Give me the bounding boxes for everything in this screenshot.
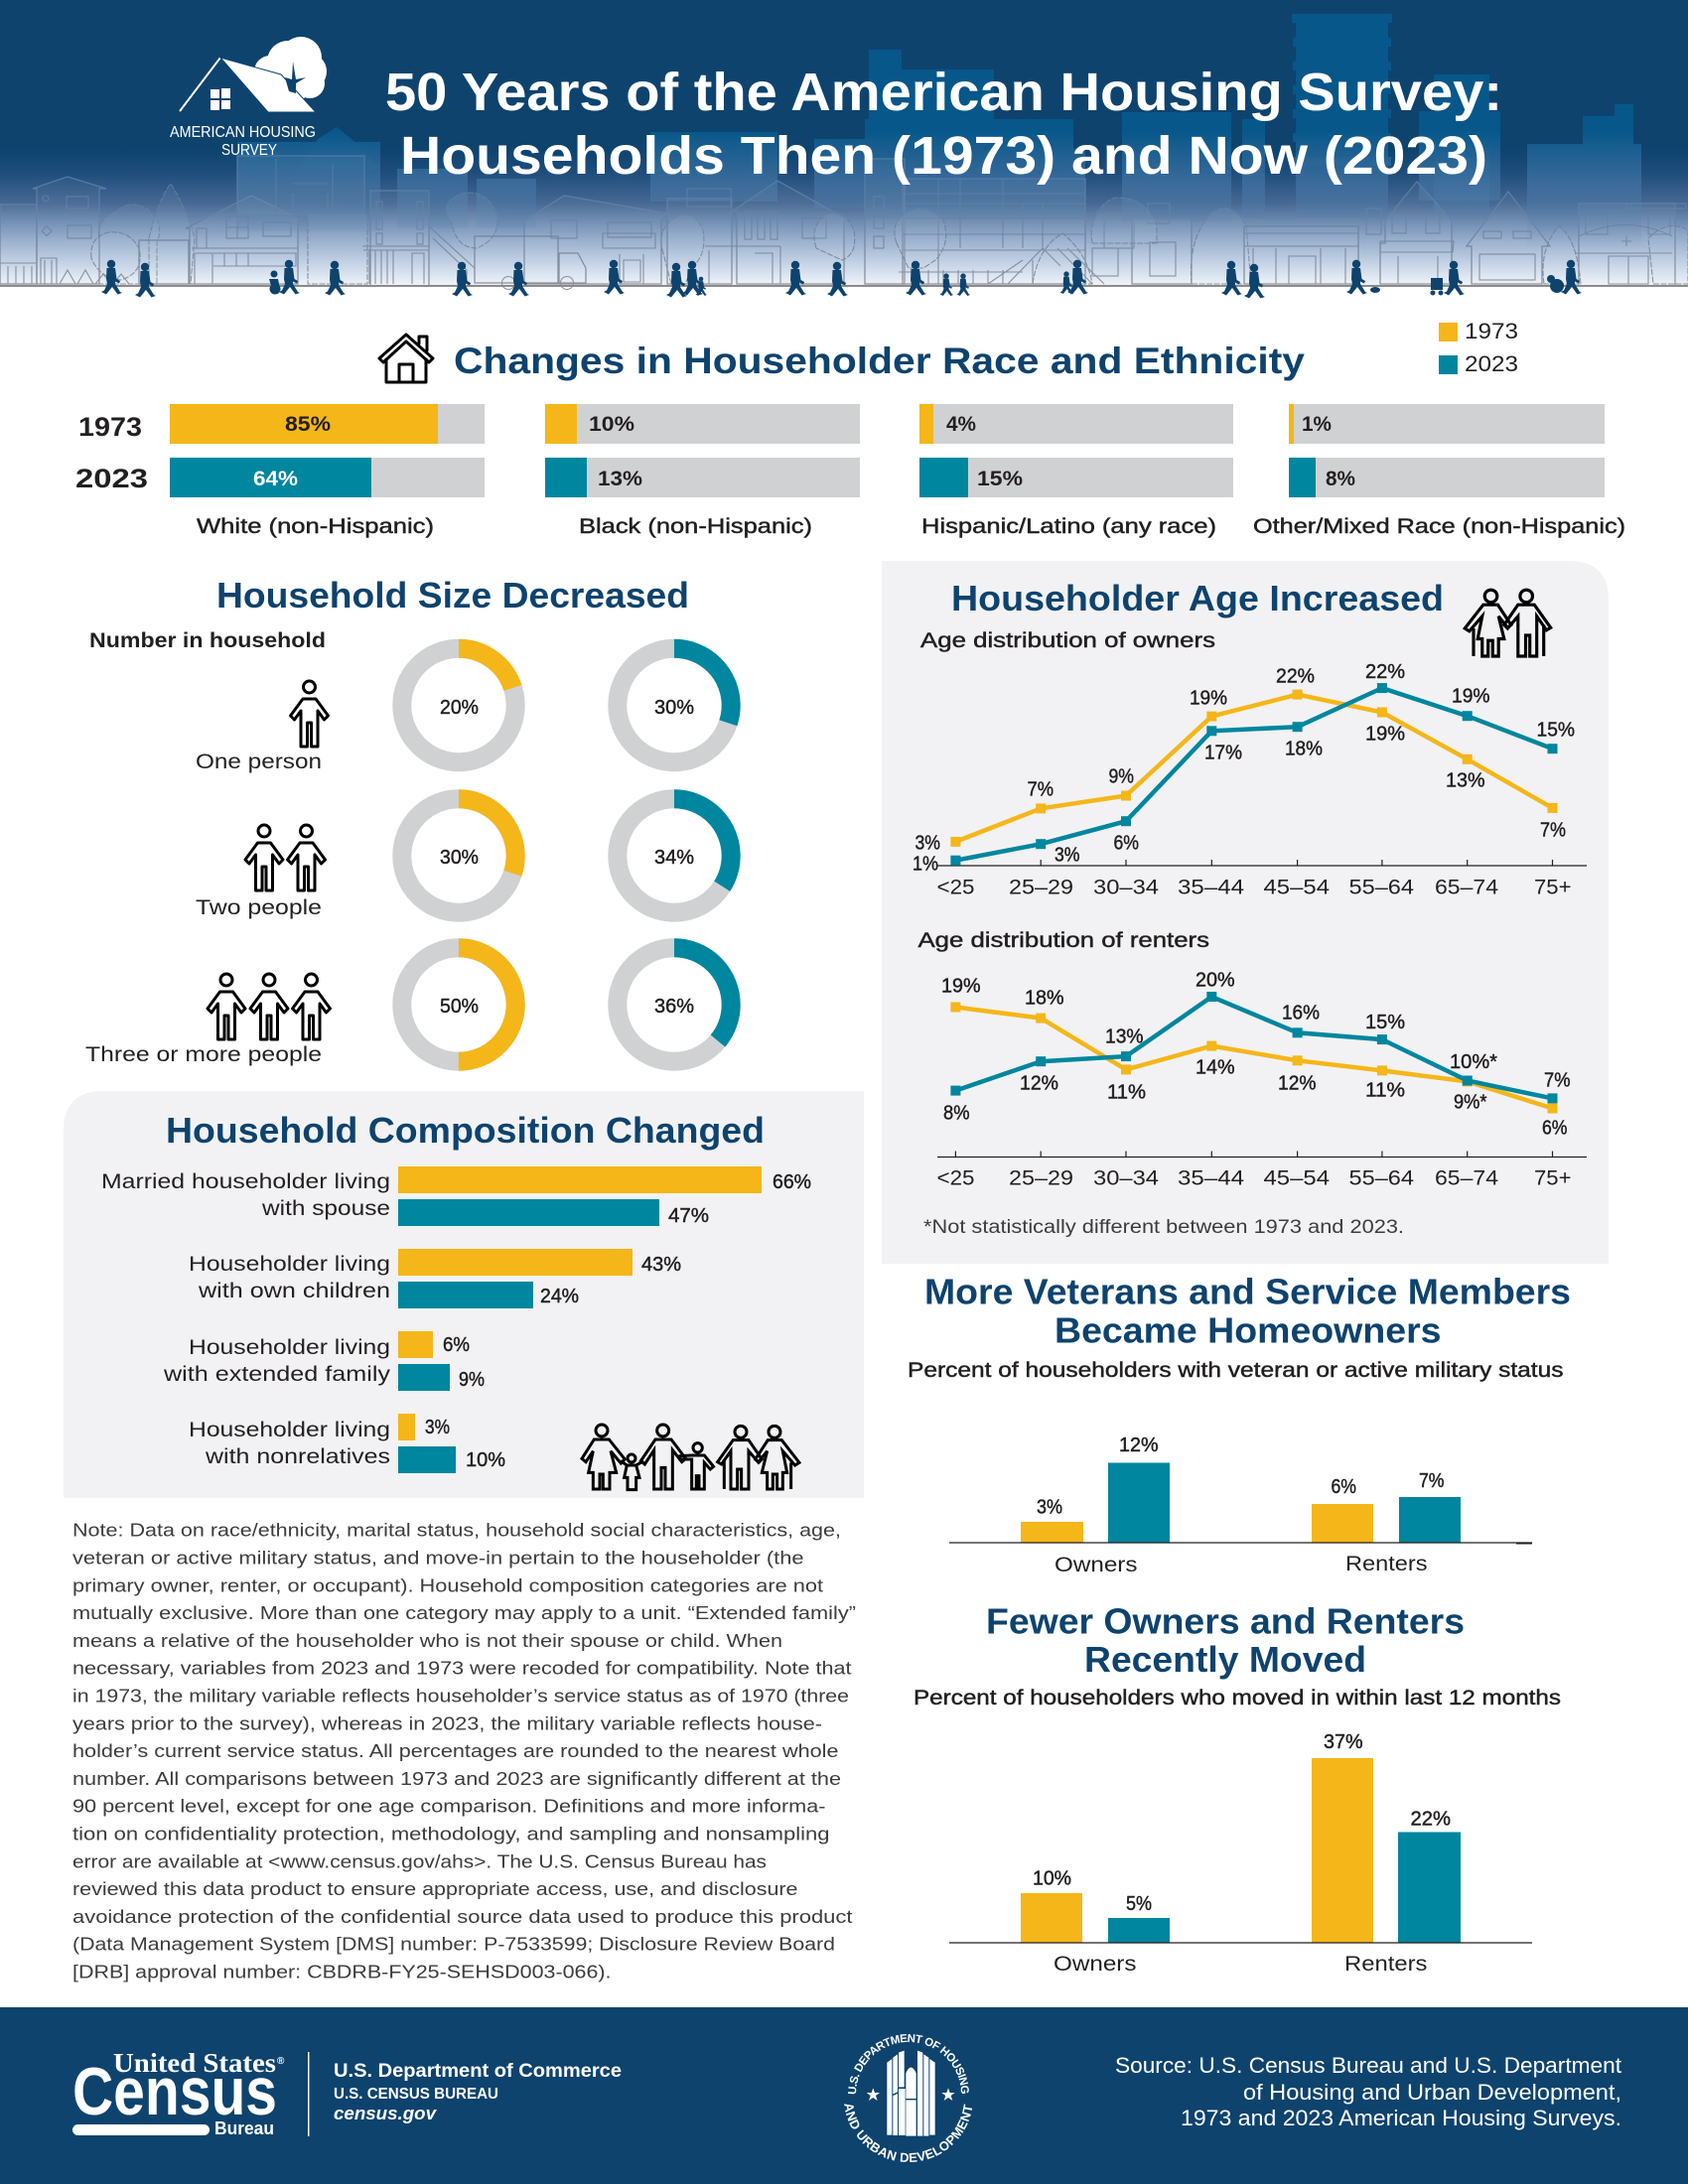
bars: Hispanic: 15% xyxy=(977,468,1023,490)
icon: older couple xyxy=(1465,590,1551,656)
owners value labels: 18% xyxy=(1285,739,1323,760)
bars: Black xyxy=(545,404,860,538)
group: extended family: 9% xyxy=(459,1369,485,1391)
heading: More Veterans and Service Members xyxy=(924,1271,1571,1312)
American Housing Survey logo xyxy=(170,37,327,159)
heading: Recently Moved xyxy=(1084,1639,1366,1680)
panel: household size xyxy=(85,575,731,1066)
heading xyxy=(986,1600,1465,1680)
owners value labels: 1% xyxy=(913,854,938,876)
group: nonrelatives: with nonrelatives xyxy=(205,1444,390,1468)
note text block: error are available at <www.census.gov/ahs>. The U.S. Census Bureau has xyxy=(72,1852,767,1872)
year labels xyxy=(75,412,148,493)
panel: race and ethnicity xyxy=(75,319,1625,538)
bar chart: veteran status: Renters xyxy=(1345,1552,1428,1575)
owners axis labels: 45–54 xyxy=(1263,876,1330,899)
renters value labels: 18% xyxy=(1025,987,1064,1009)
footer xyxy=(0,2007,1688,2184)
chart: owners age distribution xyxy=(913,629,1587,899)
owners value labels: 9% xyxy=(1108,766,1134,788)
renters value labels: 8% xyxy=(943,1102,970,1124)
group: nonrelatives xyxy=(189,1414,505,1473)
owners value labels: 13% xyxy=(1446,770,1485,792)
renters axis labels: 30–34 xyxy=(1093,1167,1159,1189)
bars: Hispanic: Hispanic/Latino (any race) xyxy=(921,515,1216,538)
renters axis labels: 65–74 xyxy=(1435,1167,1498,1189)
panel: householder age xyxy=(882,561,1609,1264)
bars: White: 85% xyxy=(285,413,331,436)
bars: Other: 8% xyxy=(1326,468,1355,490)
street scene houses xyxy=(0,156,1688,290)
footnote: *Not statistically different between 1973 and 2023. xyxy=(923,1217,1404,1238)
note text block: means a relative of the householder who is not their spouse or child. When xyxy=(72,1631,782,1651)
owners axis labels: 55–64 xyxy=(1348,876,1414,899)
group: nonrelatives: 3% xyxy=(425,1417,450,1438)
panel: veterans and service members xyxy=(908,1271,1571,1576)
bar chart: veteran status: 6% xyxy=(1331,1476,1356,1498)
owners value labels: 3% xyxy=(1055,844,1080,866)
owners axis labels: 35–44 xyxy=(1178,876,1244,899)
renters value labels: 13% xyxy=(1105,1026,1144,1048)
Census Bureau logo: United States xyxy=(113,2048,276,2078)
owners value labels: 7% xyxy=(1540,820,1566,842)
bars: Black: Black (non-Hispanic) xyxy=(579,515,812,538)
subheading: Number in household xyxy=(89,629,326,652)
owners axis labels xyxy=(937,876,1571,899)
note text block: primary owner, renter, or occupant). Household composition categories are not xyxy=(72,1576,823,1596)
group: own children: 24% xyxy=(540,1286,579,1307)
sidewalk line xyxy=(0,285,1688,287)
owners axis labels: 65–74 xyxy=(1435,876,1498,899)
bar chart: moved within 12 months: 22% xyxy=(1410,1809,1451,1831)
note text block: avoidance protection of the confidential source data used to produce this product xyxy=(72,1907,853,1927)
group: married with spouse xyxy=(101,1166,811,1227)
note text block: number. All comparisons between 1973 and 2023 are significantly different at the xyxy=(72,1769,841,1789)
renters value labels: 9%* xyxy=(1454,1092,1487,1114)
note text block: in 1973, the military variable reflects householder’s service status as of 1970 (three xyxy=(72,1686,849,1706)
note text block: (Data Management System [DMS] number: P-7533599; Disclosure Review Board xyxy=(72,1934,835,1954)
source text: of Housing and Urban Development, xyxy=(1243,2080,1621,2105)
bars: Black: 10% xyxy=(589,413,634,436)
note text block: necessary, variables from 2023 and 1973 were recoded for compatibility. Note that xyxy=(72,1658,852,1678)
bar chart: veteran status: 12% xyxy=(1119,1434,1159,1456)
renters value labels: 20% xyxy=(1196,969,1235,991)
renters value labels: 12% xyxy=(1278,1072,1317,1094)
legend: 1973 xyxy=(1465,319,1518,343)
chart: owners age distribution: Age distribution of owners xyxy=(920,629,1215,652)
subheading: Percent of householders with veteran or active military status xyxy=(908,1359,1563,1382)
row: one person: One person xyxy=(196,751,322,773)
owners axis labels: 25–29 xyxy=(1009,876,1073,899)
owners value labels: 3% xyxy=(915,832,940,854)
group: own children: with own children xyxy=(198,1279,390,1302)
main title: Households Then (1973) and Now (2023) xyxy=(400,126,1487,186)
group: extended family xyxy=(163,1331,485,1391)
owners axis labels: 75+ xyxy=(1534,876,1571,899)
group: extended family: with extended family xyxy=(163,1362,390,1386)
renters value labels: 11% xyxy=(1107,1082,1146,1104)
row: one person: 20% xyxy=(440,697,479,719)
owners value labels: 19% xyxy=(1365,723,1405,745)
bar chart: veteran status: 3% xyxy=(1037,1497,1062,1519)
renters axis labels xyxy=(937,1167,1571,1189)
renters value labels: 6% xyxy=(1542,1118,1568,1140)
row: two people xyxy=(196,799,731,919)
legend xyxy=(1439,319,1518,376)
owners axis labels: 30–34 xyxy=(1093,876,1159,899)
owners value labels: 15% xyxy=(1537,719,1575,741)
note text block: Note: Data on race/ethnicity, marital status, household social characteristics, age, xyxy=(72,1521,841,1541)
note text block: tion on confidentiality protection, methodology, and sampling and nonsampling xyxy=(72,1825,830,1844)
bars: Hispanic: 4% xyxy=(946,413,976,436)
year labels: 1973 xyxy=(78,412,142,442)
note text block: reviewed this data product to ensure appropriate access, use, and disclosure xyxy=(72,1879,798,1899)
header banner xyxy=(0,0,1688,298)
owners value labels: 19% xyxy=(1452,685,1490,707)
row: two people: 30% xyxy=(440,847,479,869)
owners value labels: 6% xyxy=(1114,832,1139,854)
owners axis labels: <25 xyxy=(937,876,975,899)
row: one person: 30% xyxy=(654,697,694,719)
bars: White xyxy=(170,404,485,538)
HUD seal: AND URBAN DEVELOPMENT xyxy=(844,2104,973,2162)
bar chart: veteran status: 7% xyxy=(1419,1470,1445,1492)
group: nonrelatives: Householder living xyxy=(189,1418,390,1441)
Census Bureau logo: Census xyxy=(72,2054,277,2129)
note text block: mutually exclusive. More than one category may apply to a unit. “Extended family” xyxy=(72,1603,856,1623)
bar chart: moved within 12 months: 10% xyxy=(1033,1868,1071,1890)
owners value labels: 22% xyxy=(1276,665,1315,687)
bar chart: moved within 12 months: Owners xyxy=(1054,1952,1136,1976)
renters value labels: 7% xyxy=(1544,1070,1571,1092)
Department of Commerce text: U.S. CENSUS BUREAU xyxy=(334,2086,498,2103)
owners value labels: 7% xyxy=(1027,778,1054,800)
year labels: 2023 xyxy=(75,464,148,493)
HUD seal xyxy=(844,2034,973,2162)
logo wordmark: SURVEY xyxy=(221,142,277,159)
row: three or more people xyxy=(85,948,731,1066)
source text: Source: U.S. Census Bureau and U.S. Department xyxy=(1115,2053,1622,2078)
main title: 50 Years of the American Housing Survey: xyxy=(385,63,1502,122)
note text block: 90 percent level, except for one age comparison. Definitions and more informa- xyxy=(72,1797,826,1817)
owners value labels xyxy=(913,661,1575,876)
source text xyxy=(1115,2053,1622,2130)
chart: renters age distribution: Age distribution of renters xyxy=(917,929,1209,952)
icon: house xyxy=(379,335,433,382)
bars: Black: 13% xyxy=(598,468,642,490)
pedestrians xyxy=(101,260,1582,298)
Census Bureau logo: Bureau xyxy=(214,2118,274,2138)
note text block: [DRB] approval number: CBDRB-FY25-SEHSD003-066). xyxy=(72,1962,612,1981)
row: three or more people: 50% xyxy=(440,996,479,1018)
background skyline xyxy=(237,14,1641,263)
note text block: holder’s current service status. All percentages are rounded to the nearest whole xyxy=(72,1741,838,1761)
group: nonrelatives: 10% xyxy=(466,1449,505,1471)
row: two people: 34% xyxy=(654,847,694,869)
HUD seal: U.S. DEPARTMENT OF HOUSING xyxy=(848,2034,969,2095)
heading: Changes in Householder Race and Ethnicity xyxy=(454,341,1305,381)
group: own children: Householder living xyxy=(189,1252,390,1276)
logo wordmark: AMERICAN HOUSING xyxy=(170,124,316,141)
heading: Became Homeowners xyxy=(1055,1310,1442,1350)
note text block xyxy=(72,1521,856,1981)
renters axis labels: 25–29 xyxy=(1009,1167,1073,1189)
renters value labels: 16% xyxy=(1282,1003,1320,1024)
row: two people: Two people xyxy=(196,896,322,919)
renters value labels: 19% xyxy=(941,975,981,997)
group: own children xyxy=(189,1249,681,1308)
bar chart: veteran status xyxy=(949,1434,1532,1576)
group: extended family: 6% xyxy=(443,1334,470,1356)
legend: 2023 xyxy=(1465,351,1518,376)
heading: Fewer Owners and Renters xyxy=(986,1600,1465,1642)
heading: Household Size Decreased xyxy=(216,575,689,615)
bar chart: moved within 12 months: Renters xyxy=(1344,1952,1428,1976)
Department of Commerce text xyxy=(334,2061,622,2123)
renters value labels: 14% xyxy=(1196,1056,1235,1078)
panel: recent movers xyxy=(914,1600,1561,1976)
renters value labels: 12% xyxy=(1020,1072,1058,1094)
group: married with spouse: 66% xyxy=(773,1171,811,1193)
bar chart: moved within 12 months: 37% xyxy=(1324,1731,1363,1753)
row: three or more people: Three or more people xyxy=(85,1043,322,1066)
renters value labels: 11% xyxy=(1365,1080,1405,1102)
chart: renters age distribution xyxy=(917,929,1587,1189)
bars: Other xyxy=(1253,404,1625,538)
bars: Hispanic xyxy=(919,404,1233,538)
owners value labels: 17% xyxy=(1204,743,1242,764)
note text block: years prior to the survey), whereas in 2023, the military variable reflects house- xyxy=(72,1713,822,1733)
group: own children: 43% xyxy=(641,1254,681,1276)
Census Bureau logo: ® xyxy=(277,2056,285,2067)
note text block: veteran or active military status, and move-in pertain to the householder (the xyxy=(72,1549,804,1569)
bar chart: moved within 12 months xyxy=(949,1731,1532,1976)
renters axis labels: 45–54 xyxy=(1263,1167,1330,1189)
owners value labels: 19% xyxy=(1190,687,1227,709)
bar chart: veteran status: Owners xyxy=(1055,1553,1138,1576)
renters value labels: 10%* xyxy=(1450,1051,1497,1073)
logo wordmark xyxy=(170,124,316,159)
renters value labels xyxy=(941,969,1571,1140)
renters value labels: 15% xyxy=(1365,1012,1405,1033)
renters axis labels: 35–44 xyxy=(1178,1167,1244,1189)
group: married with spouse: Married householder living xyxy=(101,1169,390,1193)
heading xyxy=(924,1271,1571,1350)
icon: family xyxy=(582,1425,799,1490)
bars: Other: 1% xyxy=(1302,413,1332,436)
subheading: Percent of householders who moved in within last 12 months xyxy=(914,1687,1561,1709)
bar chart: moved within 12 months: 5% xyxy=(1126,1893,1152,1915)
heading: Household Composition Changed xyxy=(166,1110,765,1151)
panel: household composition xyxy=(64,1091,864,1498)
source text: 1973 and 2023 American Housing Surveys. xyxy=(1181,2106,1621,2130)
group: extended family: Householder living xyxy=(189,1335,390,1359)
renters axis labels: 55–64 xyxy=(1348,1167,1414,1189)
bars: Other: Other/Mixed Race (non-Hispanic) xyxy=(1253,515,1625,538)
main title xyxy=(385,63,1502,186)
renters axis labels: <25 xyxy=(937,1167,975,1189)
bars: White: 64% xyxy=(253,468,298,490)
group: married with spouse: 47% xyxy=(668,1205,709,1227)
renters axis labels: 75+ xyxy=(1534,1167,1571,1189)
heading: Householder Age Increased xyxy=(951,578,1444,618)
Department of Commerce text: U.S. Department of Commerce xyxy=(334,2061,622,2082)
group: married with spouse: with spouse xyxy=(261,1196,390,1220)
row: one person xyxy=(196,648,731,773)
row: three or more people: 36% xyxy=(654,996,694,1018)
bars: White: White (non-Hispanic) xyxy=(197,515,434,538)
Department of Commerce text: census.gov xyxy=(334,2104,437,2123)
owners value labels: 22% xyxy=(1365,661,1405,683)
